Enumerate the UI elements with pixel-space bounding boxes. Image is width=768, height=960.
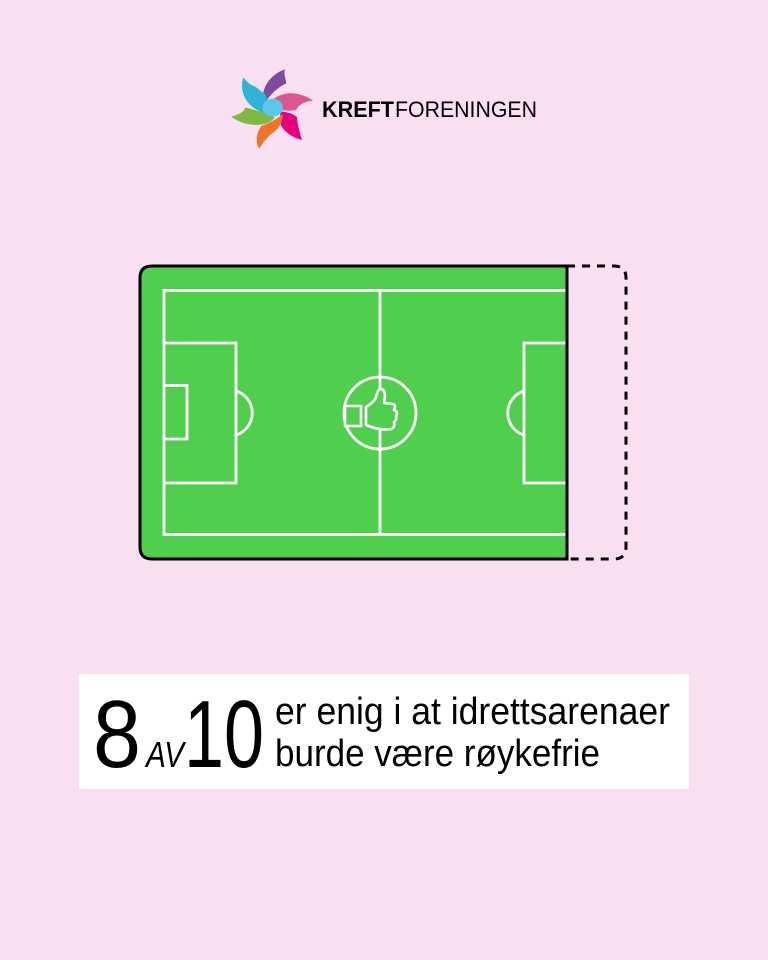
icon: thumbs up xyxy=(345,389,397,429)
white banner xyxy=(79,674,689,789)
statement text: burde være røykefrie xyxy=(275,733,600,775)
callout: statistic box xyxy=(79,674,689,789)
logo wordmark: FORENINGEN xyxy=(395,97,537,122)
pitch markings xyxy=(164,290,566,534)
football pitch diagram xyxy=(140,266,626,559)
statistic: 8 av 10: 8 xyxy=(93,681,141,788)
dashed outline: missing fifth of pitch xyxy=(567,266,626,559)
logo: Kreftforeningen xyxy=(231,69,537,149)
statistic: 8 av 10 xyxy=(93,681,264,788)
logo wordmark: KREFT xyxy=(322,97,394,122)
statistic: 8 av 10: AV xyxy=(144,734,186,775)
green pitch area xyxy=(140,266,567,559)
statement text: er enig i at idrettsarenaer xyxy=(275,691,670,733)
statistic: 8 av 10: 10 xyxy=(184,681,264,788)
icon: flower logo xyxy=(231,69,313,149)
statement text xyxy=(275,691,670,775)
